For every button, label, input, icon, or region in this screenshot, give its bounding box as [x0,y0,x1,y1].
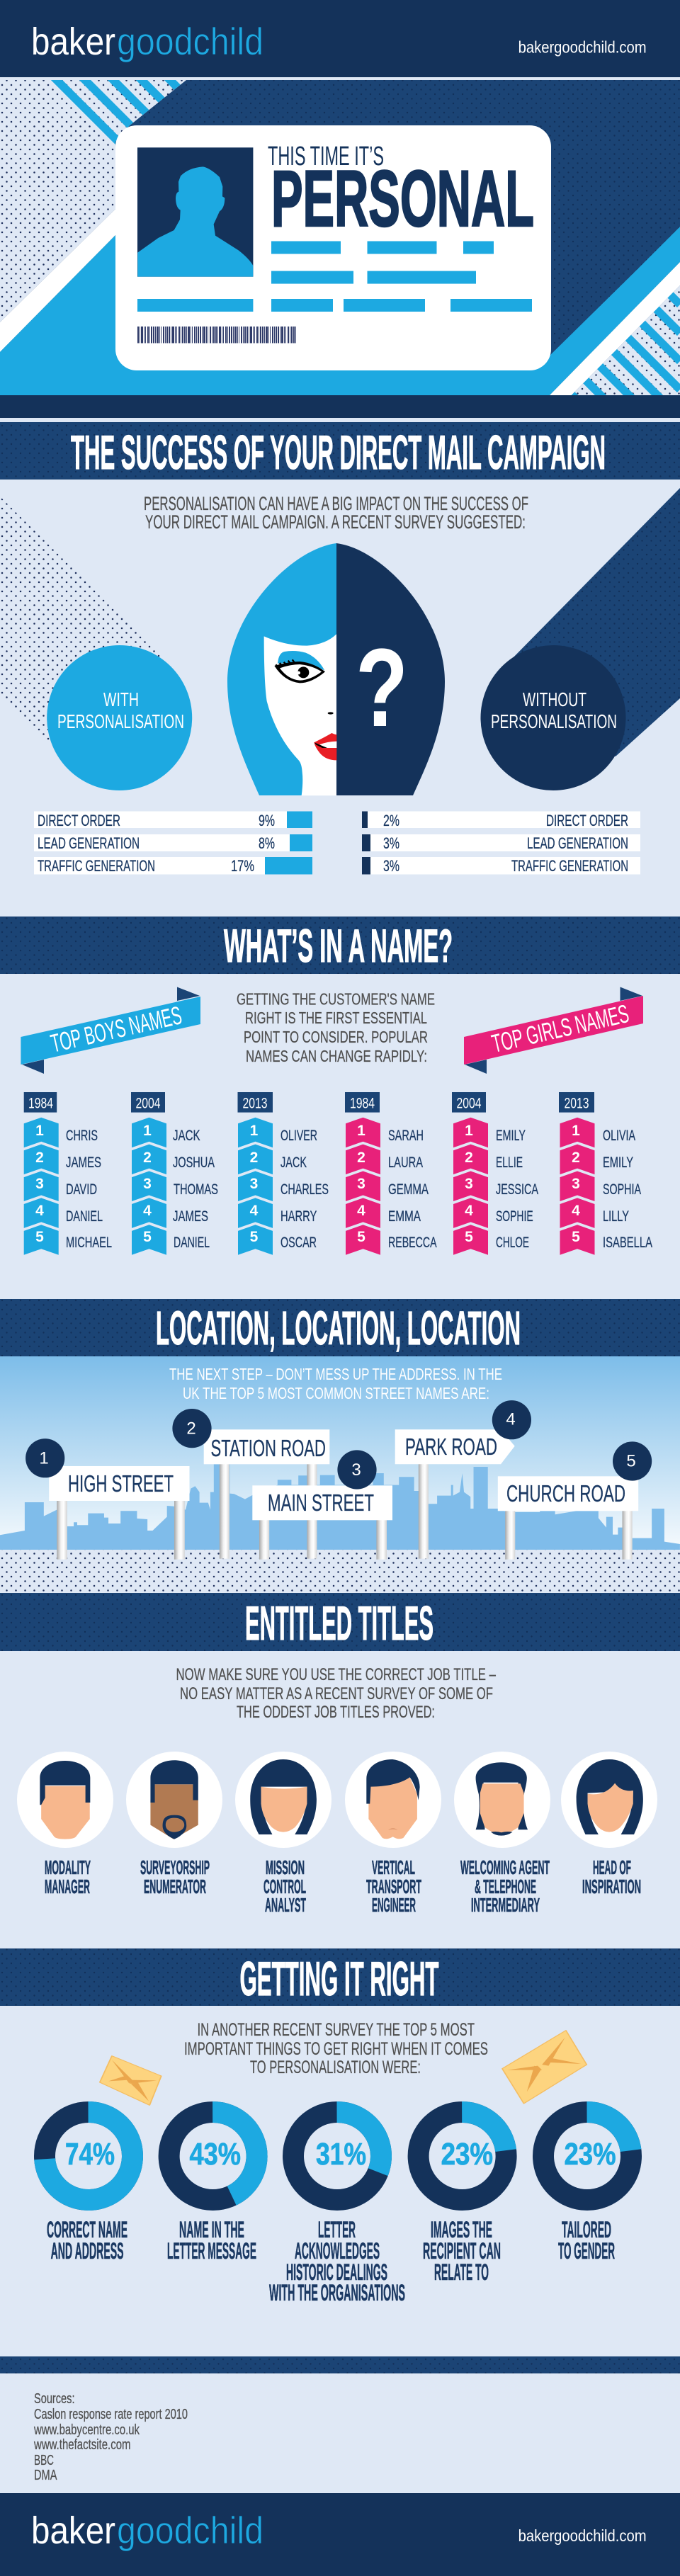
list: girls 2013: 3 [572,1176,580,1192]
list: boys 2013: 2 [250,1150,258,1166]
sources: Sources: [34,2391,75,2407]
list: girls 2013: SOPHIA [603,1181,641,1198]
list: boys 1984: 1984 [28,1095,53,1112]
banner: entitled titles [0,1593,680,1651]
sign: main street [252,1450,392,1560]
person: welcoming agent and telephone intermediary: INTERMEDIARY [471,1894,540,1916]
sign: main street: 3 [351,1460,361,1480]
list: girls 1984: REBECCA [388,1235,437,1251]
panel: getting it right: WITH THE ORGANISATIONS [269,2280,405,2305]
sign: station road: STATION ROAD [211,1435,326,1461]
donut: 23% tailored to gender [543,2112,631,2264]
list: boys 2004: JACK [173,1128,200,1144]
list: boys 1984: MICHAEL [66,1235,112,1251]
list: boys 2004 [131,1092,218,1255]
id card [115,125,551,370]
list: boys 2004: 5 [143,1229,152,1245]
bar chart: without personalisation: 3% [383,834,400,852]
intro text: TO PERSONALISATION WERE: [250,2058,421,2077]
list: girls 2004: SOPHIE [496,1208,533,1225]
list: girls 1984: LAURA [388,1154,423,1171]
list: boys 2004: JAMES [173,1208,208,1225]
list: girls 2004: 2 [465,1150,473,1166]
list: boys 2013: 5 [250,1229,259,1245]
intro text: IN ANOTHER RECENT SURVEY THE TOP 5 MOST [197,2020,475,2040]
list: boys 2004: JOSHUA [173,1154,215,1171]
list: girls 1984: 1 [357,1123,366,1139]
list: girls 2013: 1 [572,1123,580,1139]
person: vertical transport engineer [345,1752,441,1916]
sign: park road [395,1400,531,1559]
donut: 31% letter acknowledges historic dealings: ACKNOWLEDGES [295,2238,380,2264]
panel: getting it right [45,2020,631,2305]
list: boys 1984: JAMES [66,1154,101,1171]
footer logo [31,2509,264,2552]
bar chart: with personalisation [34,812,312,875]
banner: getting it right: GETTING IT RIGHT [239,1952,439,2006]
list: girls 2013: 2013 [564,1095,589,1112]
donut: 74% correct name and address: 74% [65,2137,115,2172]
list: girls 1984: 4 [357,1203,366,1219]
intro text: UK THE TOP 5 MOST COMMON STREET NAMES ARE: [183,1384,489,1402]
panel: getting it right: LETTER MESSAGE [167,2238,256,2264]
panel: getting it right: RECIPIENT CAN [423,2238,501,2264]
panel: names [21,987,652,1255]
sources: DMA [34,2468,57,2483]
hero panel [0,80,680,395]
skyline [0,1464,680,1551]
list: girls 2004: 4 [465,1203,473,1219]
person: modality manager [17,1752,113,1897]
footer logo: baker [31,2509,115,2552]
list: girls 2013 [559,1092,652,1255]
sign: main street: MAIN STREET [268,1490,374,1516]
divider band [0,2356,680,2373]
list: boys 1984 [24,1092,112,1255]
donut: 43% name in the letter message [167,2112,257,2264]
circle: with personalisation [47,645,192,790]
donut: 31% letter acknowledges historic dealings: HISTORIC DEALINGS [286,2259,387,2285]
list: girls 2013: 2 [572,1150,580,1166]
list: boys 2004: THOMAS [174,1181,218,1198]
donut: 23% images the recipient can relate to: RELATE TO [434,2259,489,2285]
card detail bars [137,241,532,312]
list: girls 2013: LILLY [603,1208,629,1225]
circle: with personalisation: PERSONALISATION [57,710,184,732]
list: boys 2013: HARRY [280,1208,317,1225]
intro text: NO EASY MATTER AS A RECENT SURVEY OF SOME OF [180,1684,493,1703]
sources: Caslon response rate report 2010 [34,2407,188,2422]
donut: 23% images the recipient can relate to [419,2112,506,2285]
person: head of inspiration: HEAD OF [593,1856,631,1878]
panel: job titles: WELCOMING AGENT [460,1856,550,1878]
panel: job titles [17,1665,657,1916]
circle: without personalisation: PERSONALISATION [491,710,617,732]
intro text [144,493,528,533]
list: boys 2004: 1 [143,1123,152,1139]
banner: entitled titles: ENTITLED TITLES [245,1596,434,1650]
illustration: half face: ? [356,626,408,750]
barcode [137,327,296,343]
list: boys 2004: 3 [143,1176,152,1192]
bar chart: without personalisation: LEAD GENERATION [527,834,628,852]
header bar [0,0,680,77]
list: boys 1984: 1 [35,1123,44,1139]
illustration: half face [227,543,445,795]
intro text [184,2020,488,2077]
ribbon: top boys names [21,987,200,1074]
sign: church road [498,1441,652,1560]
panel: getting it right: CORRECT NAME [47,2217,128,2242]
donut: 23% images the recipient can relate to: 23% [441,2137,493,2172]
list: girls 2004: 2004 [456,1095,482,1112]
person: vertical transport engineer: ENGINEER [372,1894,416,1916]
list: girls 1984: 1984 [350,1095,375,1112]
sign: park road: 4 [506,1410,516,1429]
donut: 23% tailored to gender: TAILORED [562,2217,611,2242]
sign: park road: PARK ROAD [405,1434,497,1460]
bar chart: with personalisation: DIRECT ORDER [38,812,120,829]
sources [33,2391,188,2483]
list: girls 2013: OLIVIA [603,1128,635,1144]
list: girls 2013: 4 [572,1203,580,1219]
person: head of inspiration [561,1752,657,1897]
list: boys 2004: 2 [143,1150,152,1166]
list: girls 1984: 5 [357,1229,366,1245]
heading: this time it's: THIS TIME IT’S [268,142,384,171]
sign: church road: 5 [626,1452,636,1471]
icon: envelope left [100,2056,162,2105]
bar chart: without personalisation: 3% [383,857,400,875]
person: mission control analyst: CONTROL [264,1876,306,1897]
donut: 23% images the recipient can relate to: IMAGES THE [431,2217,492,2242]
panel: getting it right: AND ADDRESS [51,2238,124,2264]
list: boys 2013: JACK [280,1154,307,1171]
list: boys 2013: 1 [250,1123,259,1139]
list: girls 1984: 3 [357,1176,366,1192]
list: boys 1984: DANIEL [66,1208,103,1225]
list: boys 2013 [238,1092,329,1255]
banner: what's in a name [0,917,680,974]
person: modality manager: MODALITY [45,1856,91,1878]
intro text: GETTING THE CUSTOMER'S NAME [237,990,435,1009]
list: girls 2004: EMILY [496,1128,526,1144]
person: mission control analyst: MISSION [266,1856,305,1878]
list: girls 2004: ELLIE [496,1154,523,1171]
intro text [237,990,435,1065]
footer url: bakergoodchild.com [518,2526,647,2545]
list: girls 2013: EMILY [603,1154,633,1171]
donut: 31% letter acknowledges historic dealings [269,2112,405,2305]
list: boys 2013: 2013 [242,1095,268,1112]
banner: what's in a name: WHAT’S IN A NAME? [224,919,453,972]
sign: high street: 1 [39,1449,49,1468]
sign: high street: HIGH STREET [68,1470,174,1497]
list: girls 2004: CHLOE [496,1235,529,1251]
footer bar [0,2493,680,2576]
list: boys 2013: 3 [250,1176,258,1192]
list: boys 1984: 2 [35,1150,44,1166]
list: girls 2004: 3 [465,1176,473,1192]
sign: high street [26,1439,189,1560]
donut: 74% correct name and address [45,2112,132,2264]
list: girls 1984: EMMA [388,1208,421,1225]
bar chart: without personalisation: TRAFFIC GENERATION [511,857,628,875]
intro text: THE NEXT STEP – DON’T MESS UP THE ADDRESS. IN THE [169,1365,502,1383]
circle: without personalisation: WITHOUT [523,688,586,710]
list: boys 2013: OSCAR [280,1235,317,1251]
list: girls 2013: 5 [572,1229,580,1245]
donut: 23% tailored to gender: 23% [564,2137,616,2172]
person: surveyorship enumerator: ENUMERATOR [144,1876,206,1897]
list: girls 1984 [345,1092,437,1255]
donut: 43% name in the letter message: NAME IN THE [179,2217,244,2242]
list: boys 2013: CHARLES [280,1181,329,1198]
list: girls 2004: 5 [465,1229,473,1245]
sources: www.babycentre.co.uk [33,2422,140,2438]
website url: bakergoodchild.com [518,38,647,57]
sign: station road [172,1409,329,1559]
list: boys 1984: CHRIS [66,1128,98,1144]
bar chart: without personalisation [362,812,640,875]
bar chart: with personalisation: LEAD GENERATION [38,834,140,852]
list: boys 1984: 3 [35,1176,44,1192]
list: girls 1984: GEMMA [388,1181,429,1198]
list: boys 1984: 5 [35,1229,44,1245]
list: boys 2004: 4 [143,1203,152,1219]
bar chart: with personalisation: TRAFFIC GENERATION [38,857,155,875]
list: boys 2004: 2004 [136,1095,161,1112]
intro text: RIGHT IS THE FIRST ESSENTIAL [245,1009,427,1027]
sign: church road: CHURCH ROAD [506,1480,625,1507]
person: welcoming agent and telephone intermediary: & TELEPHONE [475,1876,536,1897]
panel: street scene [0,1356,680,1593]
ribbon: top boys names: TOP BOYS NAMES [48,1000,184,1058]
person: welcoming agent and telephone intermediary [454,1752,550,1916]
bar chart: without personalisation: 2% [383,812,400,829]
list: girls 2004: 1 [465,1123,473,1139]
person: modality manager: MANAGER [45,1876,90,1897]
circle: without personalisation [480,645,626,790]
person: surveyorship enumerator [126,1752,222,1897]
person: vertical transport engineer: VERTICAL [372,1856,415,1878]
list: girls 2004: JESSICA [496,1181,538,1198]
person: mission control analyst: ANALYST [265,1894,306,1916]
ground [0,1550,680,1593]
bar chart: with personalisation: 8% [259,834,275,852]
ribbon: top girls names [464,987,643,1074]
intro text [169,1365,502,1402]
intro text: NOW MAKE SURE YOU USE THE CORRECT JOB TITLE – [176,1665,496,1684]
list: girls 1984: SARAH [388,1128,424,1144]
person: mission control analyst [235,1752,332,1916]
donut: 43% name in the letter message: 43% [190,2137,241,2172]
banner: getting it right [0,1948,680,2006]
portrait photo [137,147,253,277]
bar chart: with personalisation: 9% [259,812,275,829]
list: girls 1984: 2 [357,1150,366,1166]
sources: www.thefactsite.com [33,2437,130,2453]
list: boys 1984: DAVID [66,1181,97,1198]
person: surveyorship enumerator: SURVEYORSHIP [140,1856,210,1878]
list: girls 2004 [452,1092,538,1255]
logo: bakergoodchild: goodchild [117,21,264,63]
donut: 31% letter acknowledges historic dealings: LETTER [318,2217,356,2242]
logo: bakergoodchild [31,21,264,63]
logo: bakergoodchild: baker [31,21,115,63]
intro text: NAMES CAN CHANGE RAPIDLY: [246,1047,427,1065]
list: boys 1984: 4 [35,1203,44,1219]
dark band under hero [0,395,680,418]
list: girls 2013: ISABELLA [603,1235,652,1251]
list: boys 2013: OLIVER [280,1128,317,1144]
bar chart: with personalisation: 17% [231,857,254,875]
donut: 31% letter acknowledges historic dealings: 31% [316,2137,366,2172]
list: boys 2004: DANIEL [174,1235,210,1251]
intro text: THE ODDEST JOB TITLES PROVED: [237,1703,435,1722]
list: boys 2013: 4 [250,1203,259,1219]
intro text [176,1665,496,1722]
sources: BBC [34,2453,54,2468]
circle: with personalisation: WITH [103,688,139,710]
person: vertical transport engineer: TRANSPORT [366,1876,421,1897]
sign: station road: 2 [186,1419,196,1438]
bar chart: without personalisation: DIRECT ORDER [546,812,628,829]
panel: personalisation comparison [0,488,680,875]
icon: envelope right [502,2031,586,2104]
intro text: POINT TO CONSIDER. POPULAR [244,1028,428,1046]
footer logo: goodchild [117,2509,264,2552]
intro text: IMPORTANT THINGS TO GET RIGHT WHEN IT COMES [184,2039,488,2059]
